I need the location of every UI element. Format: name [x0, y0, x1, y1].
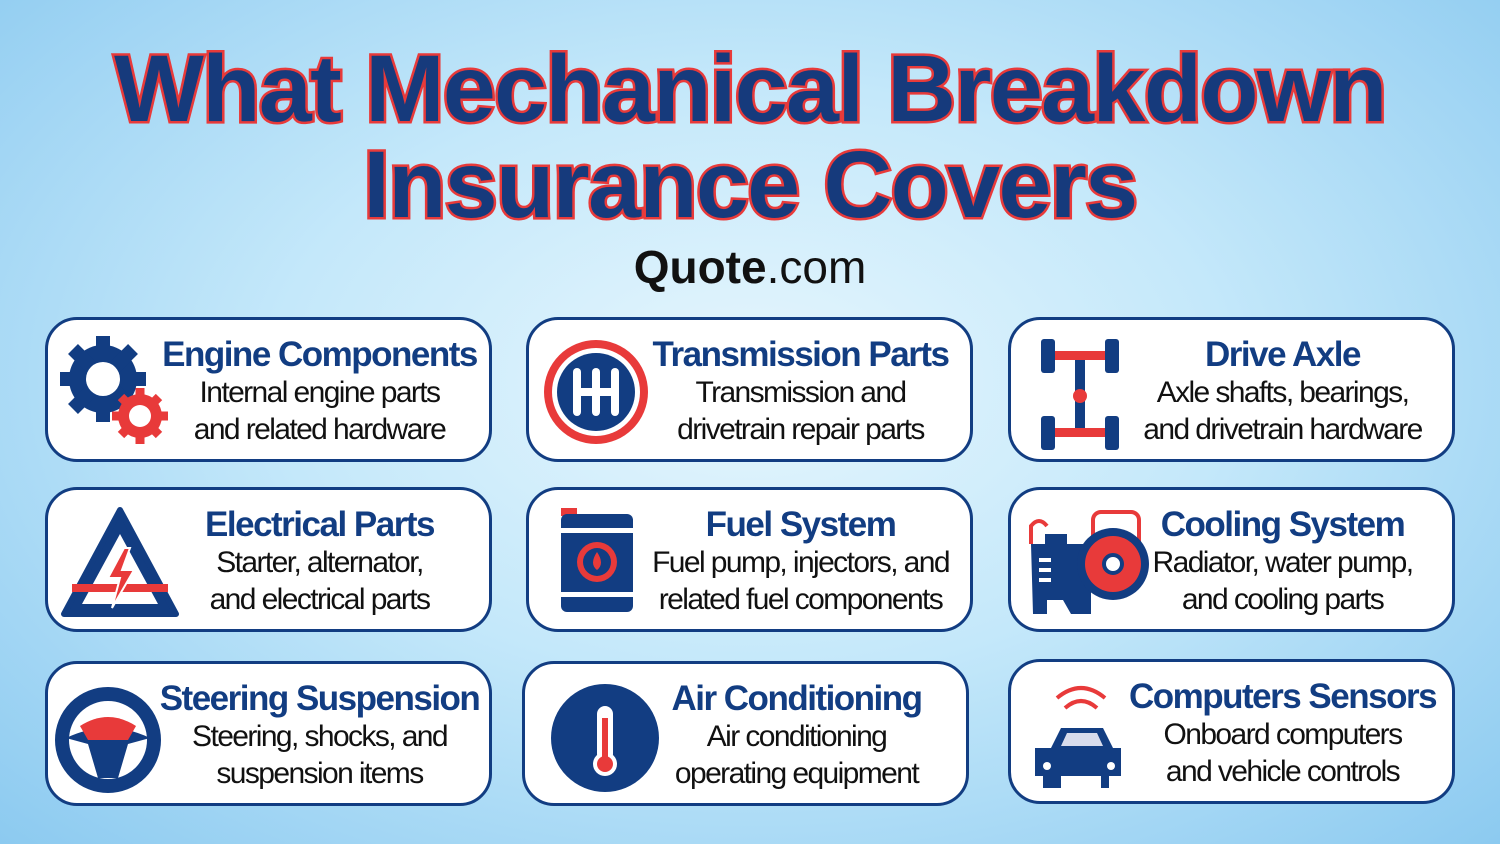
panel: air conditioning: Air Conditioning — [671, 679, 922, 718]
icon: axle — [1041, 339, 1119, 450]
icon: gears — [60, 336, 168, 444]
panel: engine components: Engine Components — [162, 335, 477, 374]
panel: transmission parts: Transmission and — [695, 376, 906, 409]
panel: steering suspension: Steering Suspension — [160, 679, 479, 718]
panel: engine components: Internal engine parts — [200, 376, 439, 409]
panel: transmission parts: drivetrain repair parts — [677, 413, 924, 446]
panel: fuel system: Fuel pump, injectors, and — [652, 546, 949, 579]
text: What Mechanical Breakdown — [114, 36, 1386, 142]
panel: electrical parts — [45, 487, 492, 632]
panel: fuel system — [526, 487, 973, 632]
icon: fuel barrel — [561, 508, 633, 612]
panel: electrical parts: Electrical Parts — [205, 505, 434, 544]
icon: gear shift — [544, 340, 648, 444]
panel: electrical parts: and electrical parts — [210, 583, 429, 616]
panel: engine components — [45, 317, 492, 462]
panel: air conditioning: operating equipment — [675, 757, 918, 790]
panel: cooling system: Radiator, water pump, — [1153, 546, 1412, 579]
panel: computers sensors — [1008, 659, 1455, 804]
panel: cooling system — [1008, 487, 1455, 632]
panel: cooling system: and cooling parts — [1182, 583, 1383, 616]
panel: transmission parts — [526, 317, 973, 462]
panel: cooling system: Cooling System — [1161, 505, 1404, 544]
panel: computers sensors: Onboard computers — [1164, 718, 1401, 751]
panel: steering suspension — [45, 661, 492, 806]
panel: fuel system: Fuel System — [706, 505, 895, 544]
text: Insurance Covers — [363, 132, 1137, 238]
panel: drive axle: and drivetrain hardware — [1143, 413, 1422, 446]
panel: steering suspension: suspension items — [216, 757, 423, 790]
panel: drive axle: Drive Axle — [1205, 335, 1360, 374]
panel: air conditioning — [522, 661, 969, 806]
icon: thermometer — [551, 684, 659, 792]
icon: steering wheel — [55, 687, 161, 793]
panel: drive axle — [1008, 317, 1455, 462]
icon: warning bolt — [61, 507, 179, 617]
panel: engine components: and related hardware — [194, 413, 445, 446]
title — [111, 36, 1386, 238]
panel: transmission parts: Transmission Parts — [653, 335, 948, 374]
panel: fuel system: related fuel components — [659, 583, 942, 616]
panel: computers sensors: Computers Sensors — [1129, 677, 1436, 716]
panel: drive axle: Axle shafts, bearings, — [1157, 376, 1408, 409]
panel: computers sensors: and vehicle controls — [1166, 755, 1399, 788]
icon: connected car — [1035, 686, 1121, 788]
panel: electrical parts: Starter, alternator, — [216, 546, 423, 579]
panel: steering suspension: Steering, shocks, and — [192, 720, 447, 753]
icon: radiator fan — [1029, 510, 1149, 614]
panel: air conditioning: Air conditioning — [707, 720, 886, 753]
brand: Quote.com: Quote.com — [634, 241, 866, 293]
